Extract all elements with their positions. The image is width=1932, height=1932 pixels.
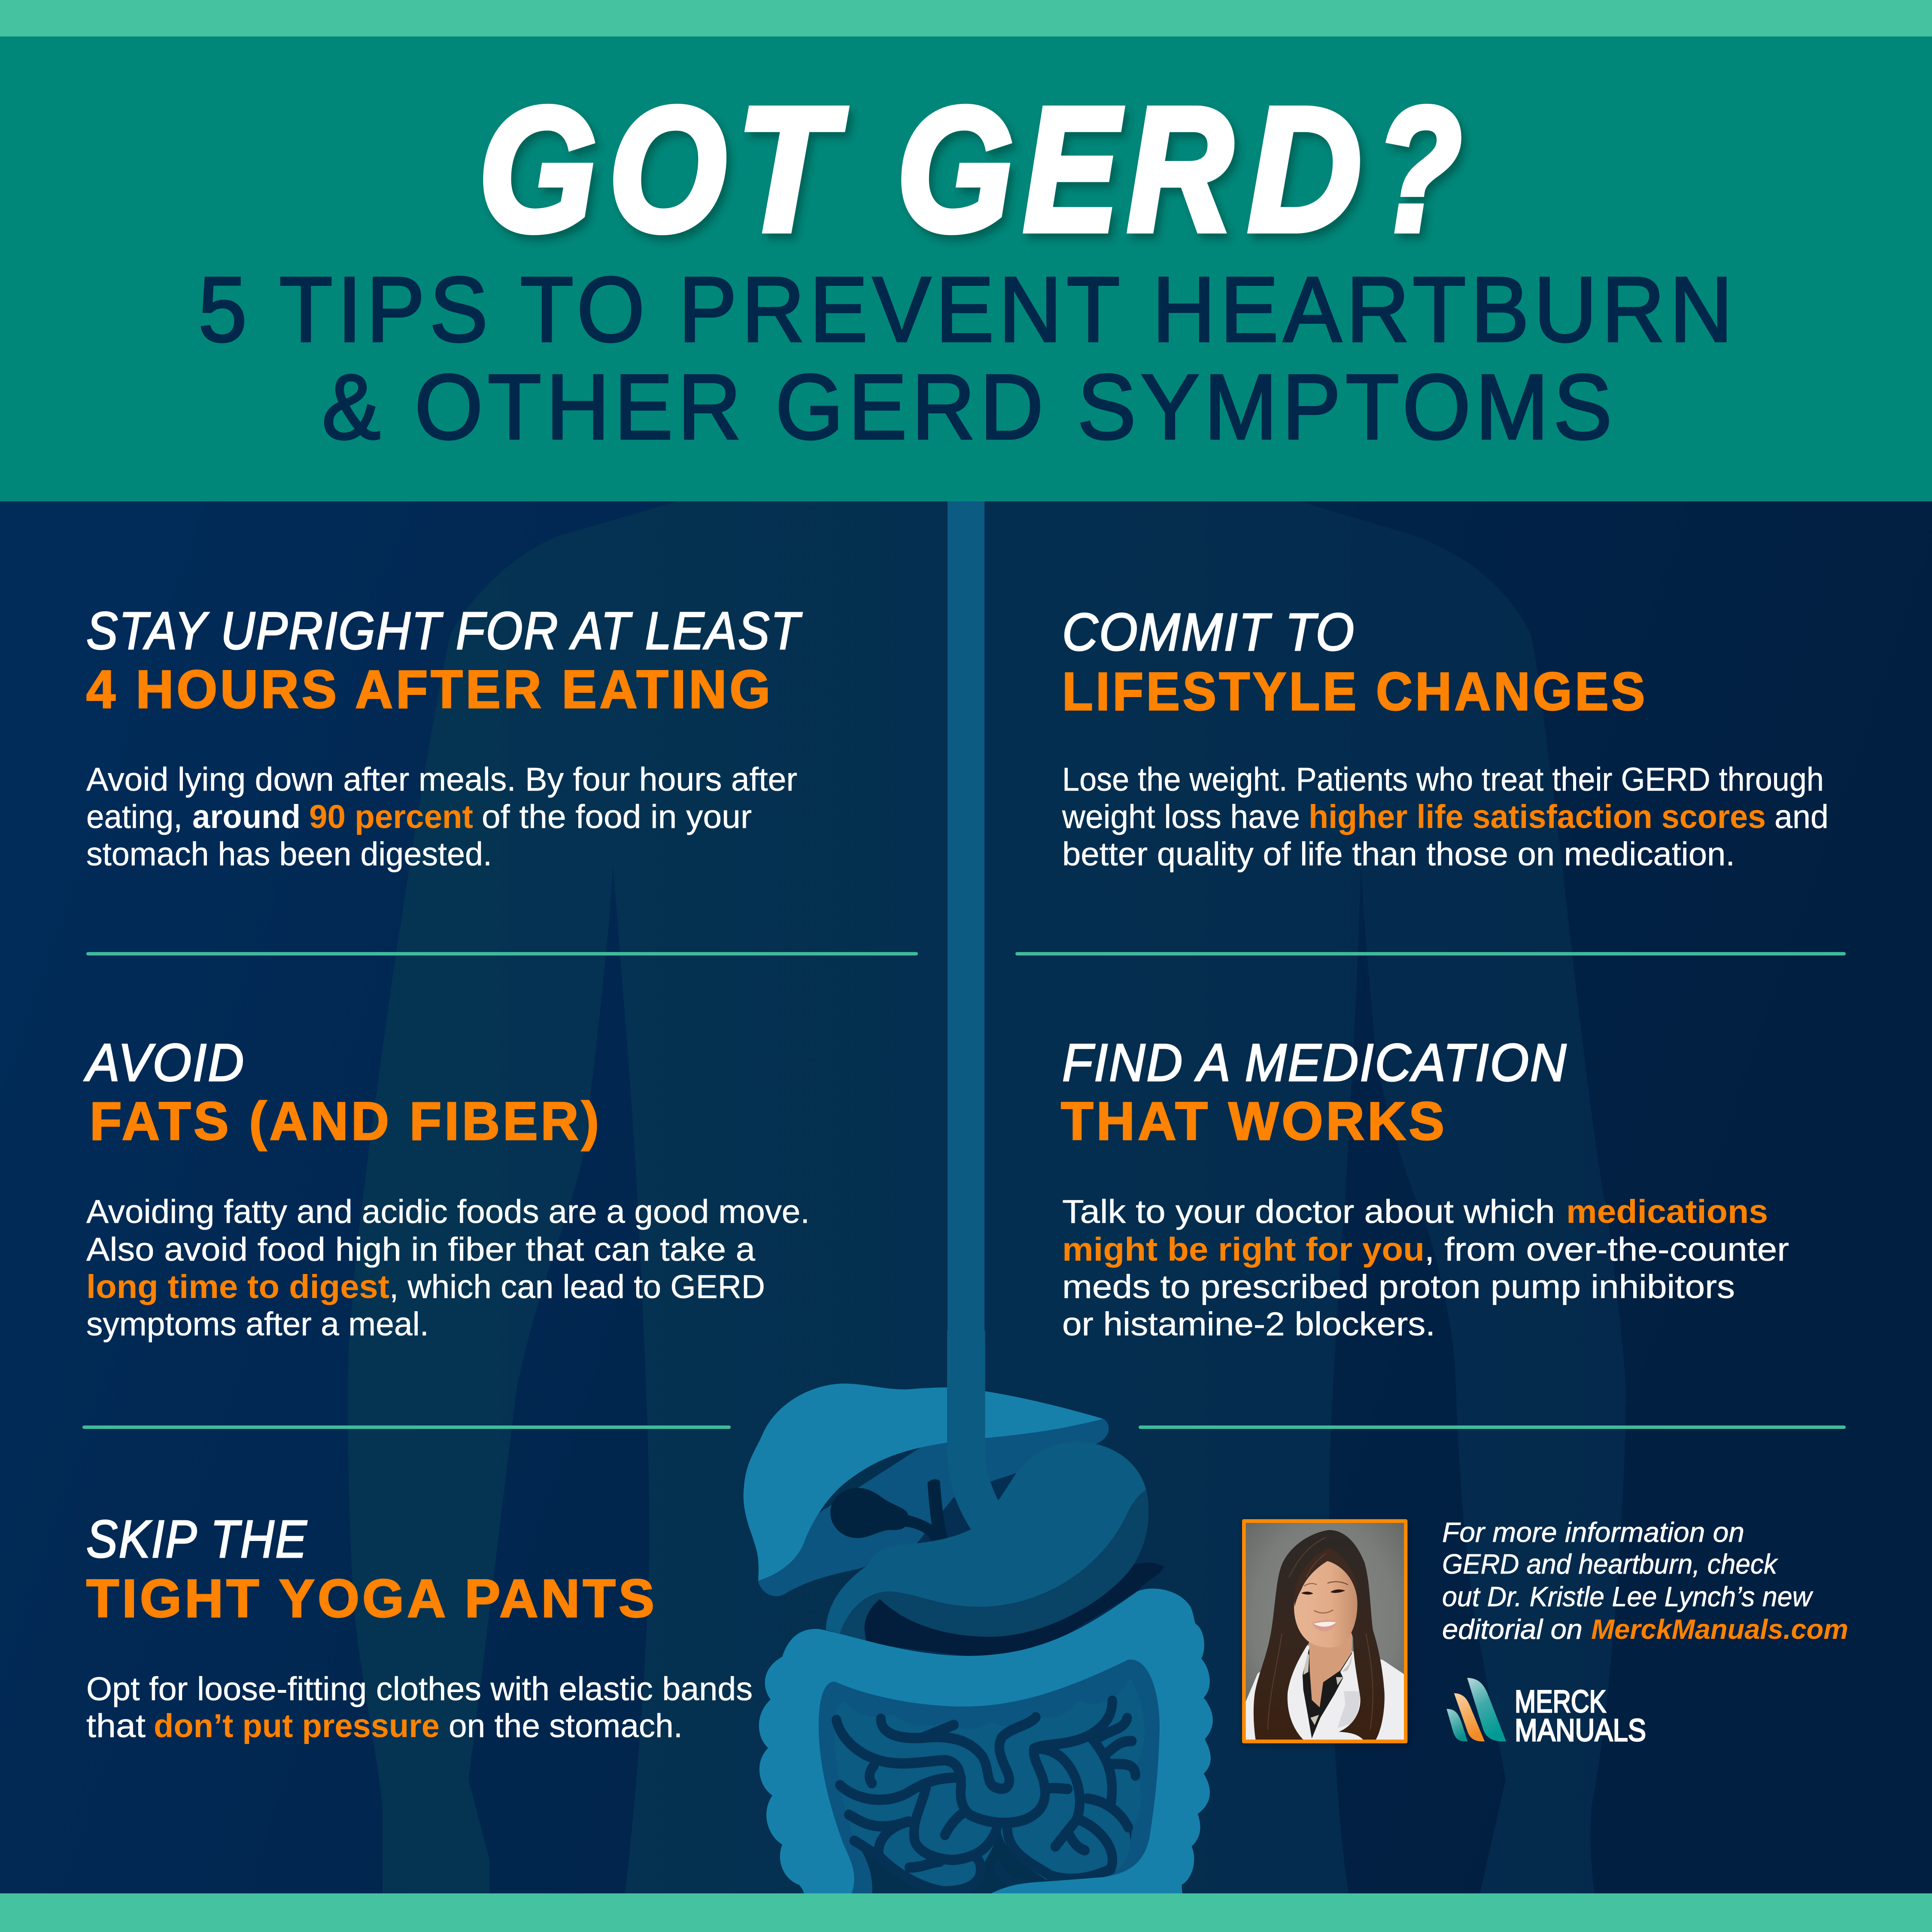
heading: tip 5: TIGHT YOGA PANTS [86, 1569, 657, 1629]
text: more information: GERD and heartburn, check [1442, 1548, 1778, 1580]
heading: tip 2 [1062, 603, 1648, 722]
panel: dark navy background [0, 501, 1932, 1893]
panel: bottom accent stripe [0, 1893, 1932, 1932]
title: O [609, 71, 726, 267]
panel: tip 4 medication [1061, 1034, 1789, 1343]
pancreas shadow area [916, 1473, 1017, 1545]
liver underside [758, 1419, 1109, 1596]
small intestine mass [835, 1678, 1145, 1887]
text: tip 5 body: on the stomach. [449, 1708, 683, 1744]
text: tip 4 body [1062, 1193, 1789, 1343]
logo wordmark [1515, 1684, 1646, 1748]
text: tip 1 body: around [192, 798, 301, 835]
text: tip 3 body: Avoiding fatty and acidic foods are a good move. [86, 1193, 810, 1230]
text: tip 4 body: Talk to your doctor about which [1062, 1193, 1555, 1230]
title: G [897, 71, 1013, 267]
text: tip 4 body: meds to prescribed proton pump inhibitors [1062, 1268, 1735, 1305]
heading: tip 3: FATS (AND FIBER) [90, 1092, 602, 1151]
heading: tip 1: STAY UPRIGHT FOR AT LEAST [86, 602, 802, 661]
title: G [479, 71, 596, 267]
heading: tip 4: FIND A MEDICATION [1062, 1034, 1567, 1092]
blouse pattern [1303, 1653, 1352, 1725]
text: more information [1442, 1516, 1848, 1645]
text: more information: out Dr. Kristle Lee Lynch’s new [1442, 1581, 1814, 1612]
panel: tip 1 stay upright [86, 602, 802, 873]
text: tip 5 body: that [86, 1708, 146, 1744]
body silhouette [348, 501, 1626, 1893]
author portrait [1242, 1519, 1407, 1743]
stomach lower band [840, 1490, 1148, 1642]
text: tip 3 body: long time to digest [86, 1268, 389, 1305]
title: R [1127, 71, 1233, 267]
hair highlights [1268, 1538, 1373, 1729]
text: more information: For more information on [1442, 1516, 1744, 1548]
title: D [1248, 71, 1361, 267]
panel: tip 2 lifestyle [1062, 603, 1829, 873]
text: tip 1 body [86, 761, 797, 873]
text: tip 2 body [1062, 761, 1829, 873]
text: tip 1 body: of the food in your [482, 798, 752, 835]
panel: top accent stripe [0, 0, 1932, 36]
subtitle: 5 TIPS TO PREVENT HEARTBURN [198, 258, 1738, 361]
facial features [1301, 1582, 1348, 1631]
logo: Merck Manuals [1446, 1678, 1646, 1748]
text: tip 4 body: or histamine-2 blockers. [1062, 1306, 1435, 1343]
large intestine [759, 1589, 1213, 1894]
text: tip 4 body: might be right for you [1062, 1231, 1425, 1268]
blouse [1303, 1649, 1352, 1738]
colon lower right cover [990, 1871, 1166, 1894]
panel: tip 3 fats [83, 1034, 810, 1343]
subtitle [198, 258, 1738, 458]
title: T [737, 71, 847, 267]
text: tip 2 body: weight loss have [1062, 798, 1300, 835]
bangs [1294, 1548, 1358, 1607]
stomach shadow [865, 1563, 1164, 1656]
colon inner band [819, 1659, 1160, 1894]
neck [1309, 1634, 1352, 1708]
text: tip 1 body: Avoid lying down after meals. By four hours after [86, 761, 797, 798]
liver [744, 1383, 1103, 1581]
text: tip 1 body: eating, [86, 798, 182, 835]
heading: tip 4 [1061, 1034, 1567, 1151]
text: tip 5 body [86, 1671, 753, 1744]
panel: tip 5 yoga pants [86, 1510, 753, 1744]
portrait frame [1242, 1519, 1407, 1743]
digestive system illustration [744, 1331, 1213, 1894]
hair back and curtains [1254, 1530, 1385, 1740]
logo mark [1446, 1678, 1506, 1741]
heading: tip 1 [86, 602, 802, 719]
panel: teal header band [0, 36, 1932, 501]
text: tip 3 body: , which can lead to GERD [389, 1268, 765, 1305]
esophagus tube [948, 501, 984, 1489]
heading: tip 3: AVOID [83, 1034, 245, 1092]
text: tip 5 body: don’t put pressure [154, 1708, 440, 1744]
text: tip 5 body: Opt for loose-fitting clothes with elastic bands [86, 1671, 753, 1708]
text: tip 2 body: and [1774, 798, 1829, 835]
photo background [1246, 1523, 1404, 1740]
gallbladder and bile duct [830, 1479, 948, 1543]
text: tip 1 body: stomach has been digested. [86, 836, 492, 873]
heading: tip 5: SKIP THE [86, 1510, 308, 1569]
logo wordmark: MANUALS [1515, 1713, 1646, 1748]
text: tip 1 body: 90 percent [309, 798, 473, 835]
text: more information: MerckManuals.com [1591, 1614, 1848, 1645]
white coat [1246, 1645, 1404, 1740]
title [479, 71, 1461, 267]
small intestine loops [836, 1701, 1136, 1891]
logo wordmark: MERCK [1515, 1684, 1606, 1719]
heading: tip 5 [86, 1510, 657, 1629]
title: ? [1376, 71, 1461, 267]
heading: tip 2: COMMIT TO [1062, 603, 1355, 662]
text: tip 3 body [86, 1193, 810, 1343]
text: tip 2 body: better quality of life than those on medication. [1062, 836, 1735, 873]
stomach and esophagus [826, 1331, 1146, 1634]
divider lines [82, 952, 1846, 1429]
text: tip 4 body: medications [1566, 1193, 1768, 1230]
text: tip 2 body: Lose the weight. Patients who treat their GERD through [1062, 761, 1824, 798]
text: tip 3 body: Also avoid food high in fiber that can take a [86, 1231, 755, 1268]
lower dark cavity [854, 1791, 1132, 1894]
heading: tip 2: LIFESTYLE CHANGES [1062, 662, 1648, 722]
heading: tip 1: 4 HOURS AFTER EATING [86, 660, 773, 719]
text: tip 2 body: higher life satisfaction scores [1309, 798, 1766, 835]
text: tip 4 body: , from over-the-counter [1425, 1231, 1789, 1268]
subtitle: & OTHER GERD SYMPTOMS [322, 355, 1617, 458]
heading: tip 4: THAT WORKS [1061, 1092, 1447, 1151]
heading: tip 3 [83, 1034, 602, 1151]
coat shading [1337, 1691, 1360, 1728]
title: E [1024, 71, 1124, 267]
face [1294, 1561, 1358, 1647]
text: tip 3 body: symptoms after a meal. [86, 1306, 429, 1343]
text: more information: editorial on [1442, 1614, 1583, 1645]
